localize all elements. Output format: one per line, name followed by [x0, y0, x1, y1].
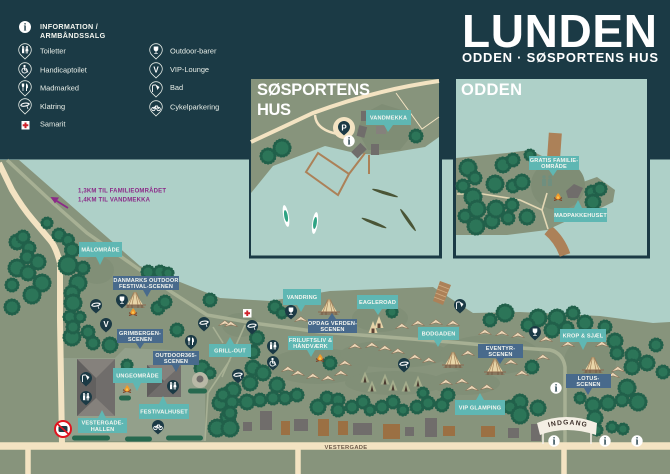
legend: bad — [150, 82, 183, 97]
large tents — [124, 292, 604, 375]
label: grill-out: GRILL-OUT — [214, 348, 246, 354]
legend: handicaptoilet — [19, 63, 87, 78]
kayaks — [361, 188, 417, 232]
arrow to familieområdet — [50, 197, 68, 208]
trees: east forest — [484, 305, 669, 435]
legend: klatring: Klatring — [40, 102, 65, 111]
grey-green footpaths — [7, 160, 565, 443]
panel heading: HUS — [257, 101, 291, 119]
label: krop og sjæl — [560, 329, 606, 350]
legend: handicaptoilet: Handicaptoilet — [40, 66, 87, 74]
label: Outdoor365-scenen — [153, 351, 199, 372]
legend: information: i — [24, 22, 27, 34]
label: Vestergade-hallen: HALLEN — [91, 427, 114, 433]
label: Danmarks Outdoor Festival-scenen — [113, 276, 179, 297]
land — [251, 79, 439, 193]
title: LUNDEN — [462, 5, 657, 57]
label: eagleroad: EAGLEROAD — [359, 300, 396, 306]
label gratis familieområde — [529, 156, 579, 176]
label vandmekka — [366, 110, 411, 132]
parking — [333, 117, 355, 139]
legend: VIP-lounge: VIP-Lounge — [170, 65, 209, 74]
inset frames — [249, 150, 650, 258]
pin: handicaptoilet — [267, 356, 279, 370]
small tents — [218, 316, 624, 390]
panel heading: ODDEN — [461, 81, 522, 99]
legend: outdoor-barer — [150, 44, 217, 59]
panel: Søsportens Hus — [251, 79, 439, 256]
legend: information: ARMBÅNDSSALG — [40, 31, 106, 40]
label: grill-out — [209, 337, 251, 357]
label: vandring: VANDRING — [287, 295, 317, 301]
label: vandring — [283, 289, 321, 312]
houses along Vestergade — [243, 411, 541, 441]
lighter venue area — [63, 348, 205, 441]
label: målområde — [79, 242, 122, 265]
legend: toiletter — [19, 44, 66, 59]
label: Opdag verden-scenen: OPDAG VERDEN- — [308, 321, 357, 327]
label: Grimbergen-scenen: GRIMBERGEN- — [119, 331, 161, 337]
label: bodgaden: BODGADEN — [422, 332, 455, 338]
family icon — [542, 175, 552, 186]
distance note — [78, 188, 166, 204]
pin: VIP-lounge: V — [103, 320, 109, 329]
campfires — [123, 308, 324, 392]
label: VIP glamping — [455, 393, 505, 415]
building: Festivalhuset — [147, 365, 181, 397]
label: Eventyr-scenen: SCENEN — [488, 352, 513, 358]
label gratis familieområde: GRATIS FAMILIE- — [530, 158, 578, 164]
docks — [306, 153, 369, 195]
main map land — [0, 160, 670, 474]
label: målområde: MÅLOMRÅDE — [81, 246, 120, 254]
label: Grimbergen-scenen — [117, 329, 163, 349]
label madpakkehuset: MADPAKKEHUSET — [554, 213, 607, 219]
label: VIP glamping: VIP GLAMPING — [459, 406, 501, 412]
top pier — [547, 133, 562, 157]
pin: VIP-lounge — [100, 318, 112, 332]
road — [251, 81, 439, 142]
distance note: 1,4KM TIL VANDMEKKA — [78, 198, 151, 204]
clearing — [531, 160, 585, 210]
label: Lotus-scenen — [566, 374, 611, 395]
label: friluftsliv og håndværk — [288, 336, 333, 357]
label: festivalhuset — [139, 396, 189, 419]
legend: klatring — [19, 99, 65, 114]
panel heading — [257, 81, 370, 119]
pins: outdoor-barer — [116, 294, 541, 340]
legend: VIP-lounge: V — [153, 66, 159, 74]
grill-out ring — [192, 372, 208, 388]
hedges — [72, 388, 207, 442]
label: Grimbergen-scenen: SCENEN — [128, 337, 152, 343]
label: ungeområde: UNGEOMRÅDE — [116, 372, 159, 380]
info points — [548, 382, 643, 447]
buildings — [351, 111, 386, 158]
icon: samarit — [243, 309, 252, 318]
label vandmekka: VANDMEKKA — [370, 116, 407, 122]
land — [456, 150, 615, 235]
label: Eventyr-scenen — [478, 344, 523, 364]
legend: information: INFORMATION / — [40, 22, 98, 31]
building: Vestergade-hallen — [77, 359, 115, 416]
label: krop og sjæl: KROP & SJÆL — [563, 334, 604, 340]
panel: Odden — [456, 79, 647, 256]
legend: information — [19, 21, 106, 40]
panel heading: SØSPORTENS — [257, 81, 370, 99]
roads — [0, 163, 670, 474]
label madpakkehuset — [554, 200, 607, 222]
label gratis familieområde: OMRÅDE — [541, 163, 567, 170]
legend: samarit — [22, 120, 65, 130]
pin: madmarked — [185, 335, 197, 350]
tree belt — [209, 332, 545, 436]
label: Vestergade-hallen: VESTERGADE- — [81, 420, 124, 426]
distance note: 1,3KM TIL FAMILIEOMRÅDET — [78, 188, 166, 194]
street name: VESTERGADE — [325, 445, 367, 451]
label: eagleroad — [357, 295, 398, 315]
activity zones — [80, 256, 616, 395]
legend: samarit: Samarit — [40, 120, 65, 128]
legend: outdoor-barer: Outdoor-barer — [170, 46, 217, 56]
label: Outdoor365-scenen: SCENEN — [164, 359, 188, 365]
footpath — [396, 93, 439, 129]
label: Lotus-scenen: LOTUS- — [578, 376, 599, 382]
label: bodgaden — [418, 327, 459, 347]
vandmekka area — [357, 104, 412, 150]
legend: toiletter: Toiletter — [40, 46, 66, 56]
label: friluftsliv og håndværk: HÅNDVÆRK — [293, 343, 328, 350]
legend — [19, 21, 219, 130]
legend: cykelparkering — [150, 101, 219, 116]
entrance arch: INDGANG — [548, 420, 586, 427]
trees: west forest — [5, 218, 117, 352]
teepees — [360, 316, 422, 392]
pins: bad — [80, 299, 466, 386]
legend: VIP-lounge — [150, 63, 209, 78]
label: Opdag verden-scenen — [308, 313, 357, 333]
label: Lotus-scenen: SCENEN — [576, 382, 601, 388]
east pier — [433, 281, 451, 305]
label: Opdag verden-scenen: SCENEN — [320, 327, 345, 333]
label: festivalhuset: FESTIVALHUSET — [140, 410, 188, 416]
madpakkehus — [566, 184, 583, 198]
pins: toiletter — [80, 340, 279, 406]
label: Danmarks Outdoor Festival-scenen: FESTIVAL-SCENEN — [119, 284, 173, 290]
panel: Søsportens Hus: P — [341, 124, 347, 132]
parking spur — [315, 115, 338, 134]
label: friluftsliv og håndværk: FRILUFTSLIV & — [289, 338, 332, 344]
legend: bad: Bad — [170, 83, 183, 92]
label: Danmarks Outdoor Festival-scenen: DANMARKS OUTDOOR — [113, 278, 179, 284]
entrance arch — [537, 417, 597, 444]
trees — [261, 149, 275, 163]
label: Outdoor365-scenen: OUTDOOR365- — [155, 353, 197, 359]
label: Eventyr-scenen: EVENTYR- — [486, 346, 515, 352]
trees — [460, 160, 476, 176]
paddleboards — [281, 205, 319, 234]
legend: madmarked — [19, 81, 79, 96]
label: Vestergade-hallen — [78, 410, 127, 433]
paths — [457, 193, 548, 229]
subtitle: ODDEN · SØSPORTENS HUS — [462, 50, 658, 65]
campfire — [554, 193, 562, 200]
pins: klatring — [90, 299, 410, 384]
legend: cykelparkering: Cykelparkering — [170, 102, 219, 112]
icon: no cars sign — [55, 421, 71, 437]
legend: madmarked: Madmarked — [40, 84, 79, 92]
label: ungeområde — [113, 368, 162, 391]
bottom pier — [548, 230, 565, 255]
trees: central — [122, 266, 397, 378]
pin: cykelparkering — [152, 420, 164, 434]
